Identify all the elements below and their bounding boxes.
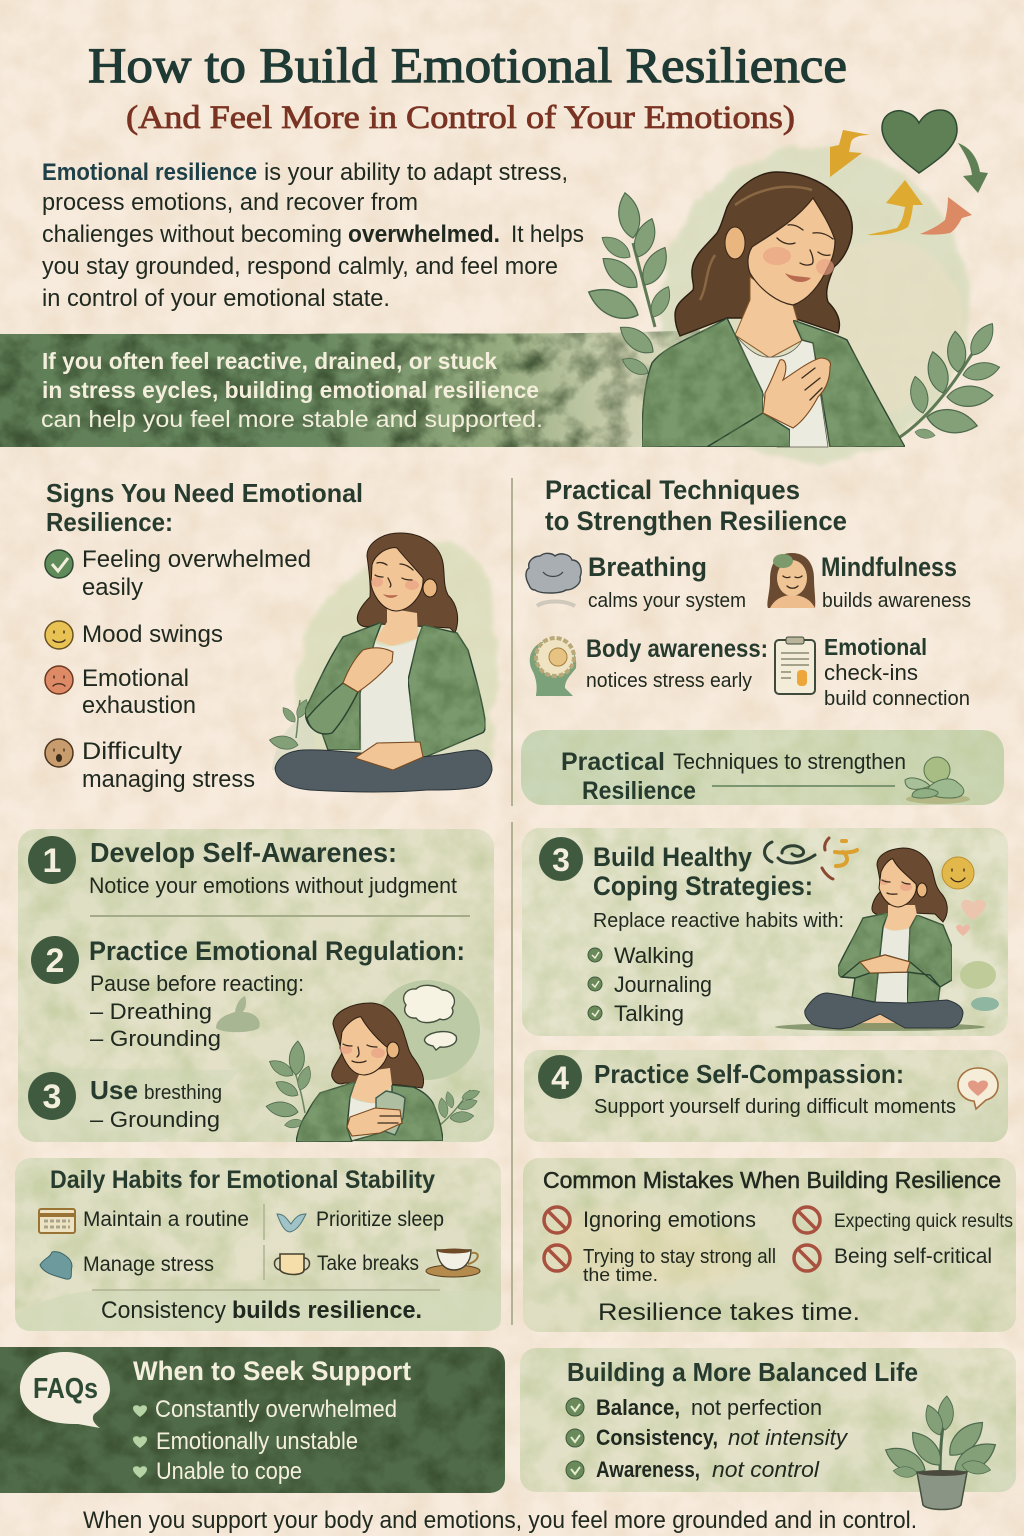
- step text: [594, 1059, 956, 1118]
- step 2: – Dreathing: [90, 999, 212, 1024]
- banner text: If you often feel reactive, drained, or stuck: [42, 348, 498, 374]
- icon: coping swirls: [764, 838, 857, 879]
- step text: Support yourself during difficult moments: [594, 1096, 956, 1118]
- item: consistency: [566, 1425, 849, 1450]
- step badge 3: [539, 837, 583, 881]
- FAQs speech bubble: [20, 1352, 110, 1428]
- support list: Constantly overwhelmed: [155, 1396, 397, 1423]
- callout: consistency: builds resilience.: [232, 1297, 422, 1324]
- icon: cup: [274, 1254, 310, 1274]
- callout: practical techniques: Resilience: [582, 777, 696, 805]
- step 1: 1: [43, 842, 61, 880]
- intro paragraph: is your ability to adapt stress,: [264, 159, 568, 186]
- icon: calendar: [39, 1209, 75, 1233]
- mistake: staying strong: Trying to stay strong all: [583, 1246, 776, 1268]
- item: awareness: [566, 1457, 820, 1482]
- icon: mindfulness face: [767, 553, 815, 608]
- step 3: [28, 1072, 222, 1132]
- sign: exhaustion: [45, 665, 196, 719]
- icon: smiley: [942, 857, 999, 1011]
- heading: Coping Strategies:: [593, 871, 813, 901]
- support list: Unable to cope: [156, 1458, 302, 1485]
- step 2: 2: [46, 942, 64, 980]
- heading: Daily Habits for Emotional Stability: [50, 1166, 435, 1194]
- support list: [133, 1396, 397, 1485]
- mistake: staying strong: [544, 1245, 776, 1285]
- intro paragraph: Emotional resilience: [42, 159, 257, 186]
- illustration: woman with phone and thought bubbles: [265, 980, 481, 1142]
- heading: Common Mistakes When Building Resilience: [543, 1167, 1001, 1193]
- technique: emotional check-ins: Emotional: [824, 634, 927, 660]
- heading: [46, 478, 363, 537]
- panel: daily habits: [15, 1158, 501, 1331]
- heading: Practical Techniques: [545, 475, 800, 505]
- coping list: Journaling: [614, 972, 712, 997]
- sign: overwhelmed: Feeling overwhelmed: [82, 546, 311, 573]
- sign: difficulty: Difficulty: [82, 738, 182, 765]
- title: How to Build Emotional Resilience: [88, 37, 847, 93]
- technique: breathing: Breathing: [588, 552, 707, 582]
- intro paragraph: in control of your emotional state.: [42, 285, 390, 312]
- subtitle: (And Feel More in Control of Your Emotions): [126, 100, 795, 136]
- step 2: Practice Emotional Regulation:: [89, 936, 465, 966]
- intro paragraph: [42, 159, 584, 312]
- item: consistency: Consistency,: [596, 1425, 718, 1450]
- step text: Practice Self-Compassion:: [594, 1059, 904, 1089]
- intro paragraph: overwhelmed.: [348, 221, 500, 248]
- mistake: staying strong: the time.: [583, 1265, 658, 1285]
- step badge 4: 4: [551, 1060, 569, 1096]
- callout: consistency: Consistency: [101, 1297, 226, 1324]
- intro paragraph: chalienges without becoming: [42, 221, 342, 248]
- icon: breathing cloud: [526, 553, 581, 606]
- sign: overwhelmed: easily: [82, 574, 143, 601]
- icon: bird: [277, 1214, 306, 1232]
- coping list: [588, 943, 712, 1026]
- sign: overwhelmed: [45, 546, 311, 601]
- heading: Building a More Balanced Life: [567, 1357, 918, 1387]
- mistake: self-critical: Being self-critical: [834, 1245, 992, 1268]
- mistake: quick results: Expecting quick results: [834, 1211, 1013, 1232]
- sign: difficulty: [45, 738, 255, 793]
- coping text: Replace reactive habits with:: [593, 910, 844, 932]
- banner text: [41, 348, 543, 432]
- panel: building a more balanced life: [520, 1348, 1016, 1510]
- callout: consistency: [15, 1291, 501, 1331]
- hero background wash: [660, 147, 970, 463]
- panel: practice self-compassion: [524, 1050, 1008, 1142]
- technique: body awareness: Body awareness:: [586, 635, 768, 663]
- sign: mood swings: Mood swings: [82, 621, 223, 648]
- technique: breathing: [588, 552, 746, 612]
- step 2: [31, 936, 465, 1051]
- habit: manage stress: Manage stress: [83, 1253, 214, 1276]
- technique: emotional check-ins: build connection: [824, 688, 970, 710]
- icon: body awareness head: [530, 638, 576, 696]
- hero left leaf branch: [584, 191, 675, 379]
- habit: sleep: Prioritize sleep: [316, 1208, 444, 1231]
- technique: body awareness: [586, 635, 768, 692]
- icon: potted plant: [881, 1396, 1001, 1510]
- technique: mindfulness: builds awareness: [822, 590, 971, 612]
- icon: heart and arrows: [830, 110, 988, 235]
- panel: common mistakes: [523, 1158, 1016, 1332]
- step 3: bresthing: [144, 1082, 222, 1104]
- heading: Build Healthy: [593, 842, 752, 872]
- heading: [545, 475, 847, 536]
- vertical divider: [511, 478, 513, 1325]
- support list: Emotionally unstable: [156, 1428, 358, 1455]
- technique: emotional check-ins: check-ins: [824, 660, 918, 685]
- callout: practical techniques: Practical: [561, 748, 665, 776]
- panel: build healthy coping strategies: [522, 828, 1008, 1036]
- intro paragraph: process emotions, and recover from: [42, 189, 418, 216]
- heading: Resilience:: [46, 507, 173, 537]
- step 3: 3: [43, 1078, 61, 1116]
- footer line: When you support your body and emotions, you feel more grounded and in control.: [83, 1507, 917, 1534]
- intro paragraph: you stay grounded, respond calmly, and feel more: [42, 253, 558, 280]
- step 3: Use: [90, 1075, 138, 1105]
- banner text: can help you feel more stable and supported.: [41, 406, 543, 432]
- step 2: Pause before reacting:: [90, 971, 304, 996]
- item: balance: [566, 1395, 822, 1420]
- technique: body awareness: notices stress early: [586, 670, 752, 692]
- technique: mindfulness: Mindfulness: [821, 552, 957, 582]
- item: awareness: not control: [712, 1457, 820, 1482]
- step 1: Develop Self-Awarenes:: [90, 837, 397, 868]
- habit: breaks: Take breaks: [317, 1252, 419, 1275]
- technique: mindfulness: [821, 552, 971, 612]
- mistake: quick results: [794, 1207, 1013, 1233]
- icon: clipboard: [775, 637, 815, 694]
- callout: practical techniques: [521, 730, 1004, 805]
- illustration: seated woman meditating: [775, 848, 985, 1031]
- sign: exhaustion: Emotional: [82, 665, 189, 692]
- item: balance: Balance,: [596, 1395, 680, 1420]
- coping list: Walking: [614, 943, 694, 968]
- green banner: [0, 330, 700, 447]
- item: awareness: Awareness,: [596, 1457, 700, 1482]
- panel: when to seek support: [0, 1347, 505, 1493]
- panel: practical techniques: [521, 475, 1004, 805]
- mistake: ignoring emotions: Ignoring emotions: [583, 1207, 756, 1232]
- technique: breathing: calms your system: [588, 590, 746, 612]
- hero right leaf branch: [900, 319, 1001, 440]
- habit: routine: Maintain a routine: [83, 1208, 249, 1231]
- panel: signs you need emotional resilience: [45, 478, 496, 793]
- step badge 4: [538, 1055, 582, 1099]
- step 2: – Grounding: [90, 1026, 221, 1051]
- callout text: Resilience takes time.: [598, 1299, 860, 1326]
- sign: exhaustion: exhaustion: [82, 692, 196, 719]
- panel: self-awareness and regulation steps: [18, 829, 494, 1142]
- heading: When to Seek Support: [133, 1356, 411, 1386]
- icon: hand: [40, 1252, 72, 1279]
- heading: [593, 842, 813, 901]
- illustration: seated woman: [268, 533, 496, 792]
- sign: difficulty: managing stress: [82, 766, 255, 793]
- FAQs speech bubble: FAQs: [33, 1373, 98, 1405]
- item: balance: not perfection: [691, 1395, 822, 1420]
- item: consistency: not intensity: [728, 1425, 849, 1450]
- coping list: Talking: [614, 1001, 684, 1026]
- heading: Signs You Need Emotional: [46, 478, 363, 508]
- icon: tea cup and saucer: [426, 1248, 480, 1277]
- icon: heart speech bubble: [958, 1068, 998, 1109]
- step 3: – Grounding: [90, 1107, 220, 1132]
- step 1: Notice your emotions without judgment: [89, 873, 457, 898]
- thought bubbles: [404, 985, 454, 1023]
- step badge 3: 3: [552, 842, 570, 878]
- intro paragraph: It helps: [511, 221, 584, 248]
- step 1: [28, 836, 457, 898]
- technique: emotional check-ins: [824, 634, 970, 710]
- banner text: in stress eycles, building emotional resilience: [42, 377, 539, 403]
- hero woman with hand on heart: [642, 172, 905, 447]
- callout: practical techniques: Techniques to strengthen: [673, 749, 906, 774]
- icon: stones: [905, 757, 970, 804]
- heading: to Strengthen Resilience: [545, 506, 847, 536]
